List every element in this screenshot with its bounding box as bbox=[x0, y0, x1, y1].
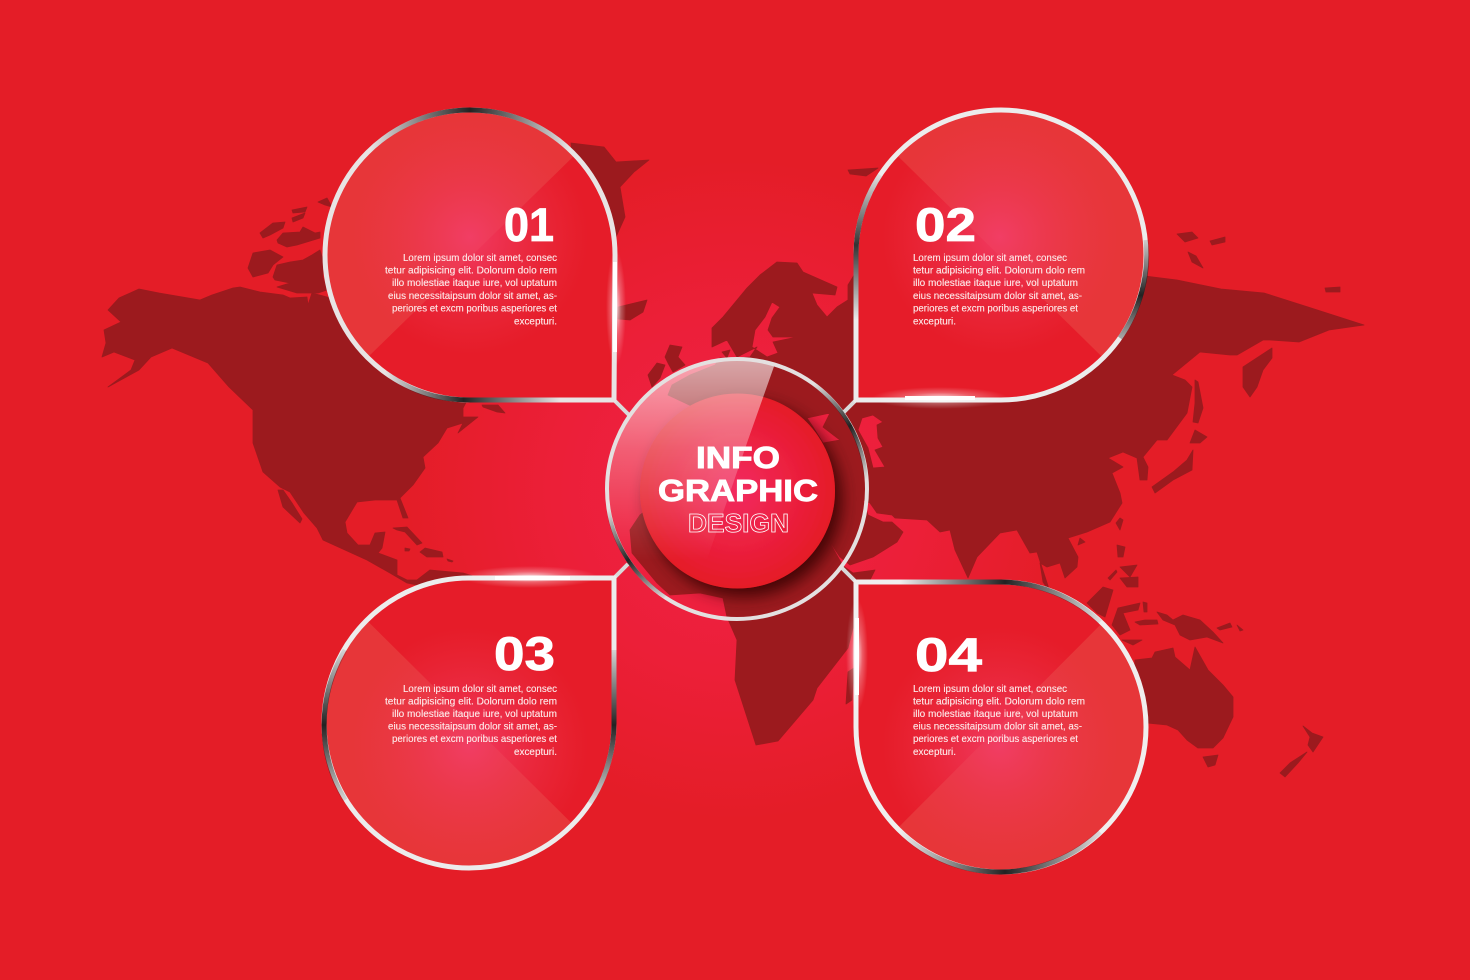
glass ring bbox=[607, 359, 867, 619]
title: GRAPHIC bbox=[658, 473, 818, 508]
inner red disc bbox=[640, 394, 835, 588]
Russian Arctic islands bbox=[848, 168, 1340, 292]
text block 01 bbox=[385, 252, 557, 328]
text block 02: tetur adipisicing elit. Dolorum dolo rem bbox=[913, 264, 1085, 276]
Australia bbox=[1130, 647, 1233, 748]
New Guinea bbox=[1157, 612, 1223, 643]
text block 01: periores et excm poribus asperiores et bbox=[392, 302, 557, 314]
small Pacific islands bbox=[1217, 623, 1243, 631]
number 04: 04 bbox=[915, 628, 982, 681]
New Zealand bbox=[1280, 726, 1323, 777]
number 01: 01 bbox=[504, 198, 554, 251]
panel: step 02 bbox=[850, 90, 1160, 409]
United Kingdom bbox=[665, 345, 685, 372]
text block 03: eius necessitaipsum dolor sit amet, as- bbox=[388, 720, 557, 732]
Caribbean islands bbox=[393, 527, 453, 562]
text block 04 bbox=[913, 683, 1085, 758]
text block 02 bbox=[913, 252, 1085, 328]
Denmark bbox=[722, 350, 730, 358]
Kamchatka bbox=[1243, 348, 1272, 397]
Iceland bbox=[618, 300, 647, 320]
Baja California bbox=[278, 490, 302, 523]
Southeast Asia islands bbox=[1087, 545, 1158, 645]
text block 03 bbox=[385, 683, 557, 758]
text block 02: periores et excm poribus asperiores et bbox=[913, 302, 1078, 314]
text block 04: Lorem ipsum dolor sit amet, consec bbox=[913, 683, 1067, 695]
text block 03: periores et excm poribus asperiores et bbox=[392, 733, 557, 745]
text block 02: excepturi. bbox=[913, 316, 956, 328]
North America bbox=[102, 287, 480, 590]
title: DESIGN bbox=[688, 508, 789, 538]
number 03: 03 bbox=[494, 627, 555, 680]
Ireland bbox=[648, 363, 665, 387]
panel: step 01 bbox=[322, 108, 626, 402]
text block 01: tetur adipisicing elit. Dolorum dolo rem bbox=[385, 264, 557, 276]
text block 04: periores et excm poribus asperiores et bbox=[913, 733, 1078, 745]
text block 03: illo molestiae itaque iure, vol uptatum bbox=[392, 708, 557, 720]
Taiwan and Hainan bbox=[1078, 518, 1123, 545]
Madagascar bbox=[846, 668, 854, 704]
Arctic islands bbox=[248, 198, 332, 293]
Japan bbox=[1152, 430, 1207, 493]
text block 01: eius necessitaipsum dolor sit amet, as- bbox=[388, 290, 557, 302]
connector lines bbox=[614, 400, 856, 582]
central glass badge bbox=[590, 350, 867, 619]
title bbox=[658, 440, 818, 538]
Newfoundland bbox=[482, 405, 505, 413]
text block 03: tetur adipisicing elit. Dolorum dolo rem bbox=[385, 696, 557, 708]
panel: step 03 bbox=[310, 566, 619, 880]
Eurasia bbox=[668, 200, 1364, 592]
panel: step 04 bbox=[846, 575, 1160, 880]
text block 02: eius necessitaipsum dolor sit amet, as- bbox=[913, 290, 1082, 302]
world map bbox=[102, 143, 1364, 777]
title: INFO bbox=[696, 440, 780, 475]
Tasmania bbox=[1203, 755, 1218, 767]
Sakhalin bbox=[1193, 380, 1203, 423]
text block 04: eius necessitaipsum dolor sit amet, as- bbox=[913, 720, 1082, 732]
Greenland bbox=[571, 143, 649, 237]
text block 04: excepturi. bbox=[913, 746, 956, 758]
number 02: 02 bbox=[915, 198, 976, 251]
text block 03: Lorem ipsum dolor sit amet, consec bbox=[403, 683, 557, 695]
glass highlight wedge bbox=[609, 361, 774, 546]
text block 04: tetur adipisicing elit. Dolorum dolo rem bbox=[913, 696, 1085, 708]
Africa bbox=[630, 470, 875, 745]
text block 01: Lorem ipsum dolor sit amet, consec bbox=[403, 252, 557, 264]
text block 01: excepturi. bbox=[514, 316, 557, 328]
text block 01: illo molestiae itaque iure, vol uptatum bbox=[392, 277, 557, 289]
text block 02: illo molestiae itaque iure, vol uptatum bbox=[913, 277, 1078, 289]
text block 03: excepturi. bbox=[514, 746, 557, 758]
text block 04: illo molestiae itaque iure, vol uptatum bbox=[913, 708, 1078, 720]
text block 02: Lorem ipsum dolor sit amet, consec bbox=[913, 252, 1067, 264]
